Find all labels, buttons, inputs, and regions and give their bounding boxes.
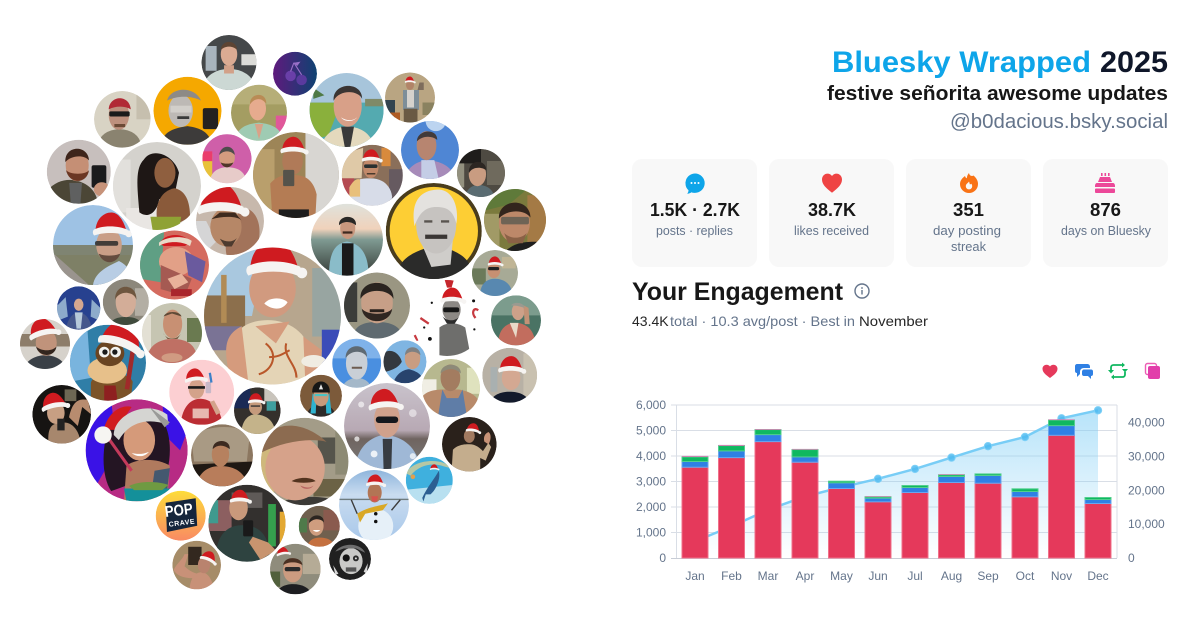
avatar: mustache view [311, 204, 383, 276]
month labels: Jun [868, 569, 888, 583]
avatar: tattooed man [491, 295, 541, 345]
left axis labels: 5,000 [636, 424, 666, 438]
avatar: dolphin rainbow [406, 457, 453, 504]
avatar: dark selfie [457, 149, 505, 197]
avatar: glasses man foliage [484, 189, 546, 251]
avatar: santa white wall [482, 348, 537, 403]
avatar bubble cluster [20, 35, 546, 594]
avatar: boardwalk glasses santa [53, 205, 133, 285]
stat card: streak [906, 159, 1031, 267]
avatar: donkey kong [70, 324, 146, 401]
icon: quotes [1146, 364, 1160, 379]
avatar: sunglasses santa tee [342, 145, 403, 206]
right axis labels: 30,000 [1128, 450, 1165, 464]
stat card: streak: streak [951, 240, 987, 254]
avatar: man on pink [202, 134, 252, 183]
stacked bars [682, 419, 1111, 558]
engagement summary [632, 313, 928, 329]
avatar: large man santa poolside [204, 240, 341, 384]
avatar: palm resort [310, 73, 384, 147]
engagement summary: November [859, 313, 928, 329]
stat card: posts and replies: 1.5K · 2.7K [650, 200, 740, 220]
stat card: days on Bluesky: 876 [1090, 200, 1121, 220]
right axis labels: 0 [1128, 551, 1135, 565]
month labels: Sep [977, 569, 999, 583]
avatar: beanie santa bearded [20, 314, 70, 369]
icon: likes heart [1042, 365, 1058, 378]
engagement summary: total · 10.3 avg/post · Best in [670, 313, 855, 329]
avatar: dark santa cream sweater [442, 417, 497, 472]
avatar: red cap glasses [94, 91, 150, 148]
avatar: blue tank top [422, 359, 480, 417]
icon: reposts [1111, 365, 1125, 377]
month labels: Aug [941, 569, 962, 583]
stat card: posts and replies [632, 159, 757, 267]
avatar: blue tinted man [332, 339, 381, 388]
avatar: round sunglasses santa [270, 544, 321, 594]
month labels [685, 569, 1109, 583]
avatar: skull [329, 538, 371, 580]
avatar: beard selfie [47, 140, 111, 204]
stat card: streak: day posting [933, 224, 1001, 238]
avatar: dark beard close-up [344, 272, 410, 338]
avatar: sticker man with candy canes [414, 280, 479, 356]
avatar: man with dog [384, 340, 426, 383]
avatar: black hat teal hair [300, 375, 342, 417]
left axis labels: 6,000 [636, 398, 666, 412]
title: Bluesky Wrapped [832, 46, 1091, 79]
left axis labels: 2,000 [636, 500, 666, 514]
right axis labels [1128, 416, 1165, 565]
avatar: dark santa arm up [32, 385, 91, 444]
stat card: days on Bluesky: days on Bluesky [1061, 224, 1152, 238]
subtitle: festive señorita awesome updates [827, 83, 1168, 105]
icon: speech bubble [685, 174, 705, 194]
cumulative line [695, 407, 1102, 541]
right axis labels: 20,000 [1128, 484, 1165, 498]
avatar: main profile on yellow [386, 183, 482, 279]
avatar: brown cap close-up [261, 418, 348, 505]
avatar: flexing santa [172, 541, 221, 589]
icon: cake [1095, 173, 1115, 193]
chart legend icons [1042, 362, 1160, 380]
stat card: streak: 351 [953, 200, 984, 220]
right axis labels: 10,000 [1128, 517, 1165, 531]
avatar: floral shirt santa [472, 250, 518, 296]
cumulative area [695, 410, 1098, 558]
avatar: blue sky man [401, 121, 459, 179]
month labels: May [830, 569, 853, 583]
stat card: days on Bluesky [1043, 159, 1168, 267]
month labels: Oct [1016, 569, 1035, 583]
engagement heading: Your Engagement [632, 278, 844, 306]
stat card: likes: likes received [794, 224, 869, 238]
avatar: pale man [103, 279, 149, 325]
month labels: Nov [1051, 569, 1072, 583]
avatar: hawaiian shirt [231, 85, 287, 141]
month labels: Feb [721, 569, 742, 583]
month labels: Jul [907, 569, 923, 583]
avatar: pop crave logo: CRAVE [168, 519, 195, 529]
left axis labels: 3,000 [636, 474, 666, 488]
icon: replies bubbles [1075, 364, 1093, 379]
avatar: pop crave logo: POP [164, 501, 194, 521]
avatar: orange shirt smile [299, 506, 340, 547]
engagement summary: 43.4K [632, 313, 669, 329]
avatar: man in bed [191, 424, 253, 486]
month labels: Mar [758, 569, 778, 583]
avatar: comic art [140, 230, 209, 300]
avatar: woman with santa hat and salad [86, 399, 188, 501]
right axis labels: 40,000 [1128, 416, 1165, 430]
stat card: likes: 38.7K [808, 200, 856, 220]
left axis labels [636, 398, 666, 565]
month labels: Jan [685, 569, 705, 583]
avatar: cap on orange [154, 77, 222, 145]
stat card: likes [769, 159, 894, 267]
left axis labels: 1,000 [636, 526, 666, 540]
left axis labels: 4,000 [636, 449, 666, 463]
stat card: posts and replies: posts · replies [656, 224, 733, 238]
left axis labels: 0 [659, 551, 666, 565]
avatar: wizard [57, 286, 100, 330]
chart grid [671, 405, 1117, 558]
month labels: Apr [796, 569, 814, 583]
avatar: mirror selfie green tee [208, 485, 286, 562]
icon: flame [960, 173, 978, 193]
avatar: woman in green [113, 142, 201, 230]
avatar: pink background red hoodie [169, 360, 234, 425]
icon: heart [822, 174, 842, 193]
avatar: cherries [273, 52, 317, 96]
avatar: pop crave logo [156, 491, 206, 541]
title: 2025 [1100, 46, 1168, 79]
chart: monthly engagement [636, 398, 1165, 583]
avatar: pink shirt [142, 303, 202, 363]
avatar: snow sunglasses tie [344, 383, 430, 469]
avatar: man in car [202, 35, 256, 90]
avatar: tiny mirror selfie [385, 72, 435, 122]
avatar: snowman [339, 470, 409, 544]
avatar: santa floral cafe [234, 387, 281, 434]
icon: info [855, 284, 869, 298]
avatar: santa hat smiling [196, 184, 264, 255]
month labels: Dec [1087, 569, 1109, 583]
avatar: shirtless santa locker room [253, 132, 340, 218]
handle: @b0dacious.bsky.social [950, 111, 1168, 133]
